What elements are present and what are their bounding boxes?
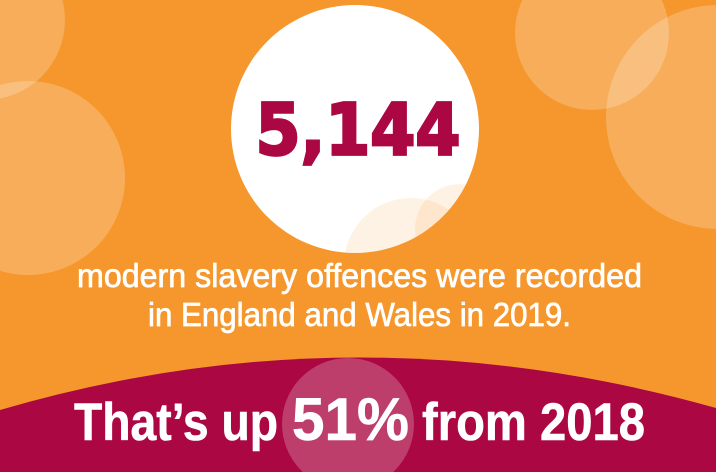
description text: [77, 257, 642, 333]
comparison statement: [74, 386, 645, 453]
text: 51%: 51%: [292, 386, 409, 453]
decorative bubble: middle left: [0, 81, 125, 275]
faint bubbles inside circle: [345, 184, 466, 253]
description line 2: in England and Wales in 2019.: [148, 296, 571, 333]
highlight bubble behind percentage: [282, 358, 414, 472]
text: from 2018: from 2018: [422, 393, 645, 452]
description line 1: modern slavery offences were recorded: [77, 257, 642, 294]
decorative bubble: right: [606, 5, 716, 229]
headline number: 5,144: [256, 88, 460, 172]
decorative bubble: top right: [515, 0, 669, 110]
burgundy curved band: [0, 357, 716, 472]
main white circle with number: [231, 5, 479, 253]
decorative bubble: top left: [0, 0, 65, 100]
text: that's up: That’s up: [74, 393, 278, 452]
